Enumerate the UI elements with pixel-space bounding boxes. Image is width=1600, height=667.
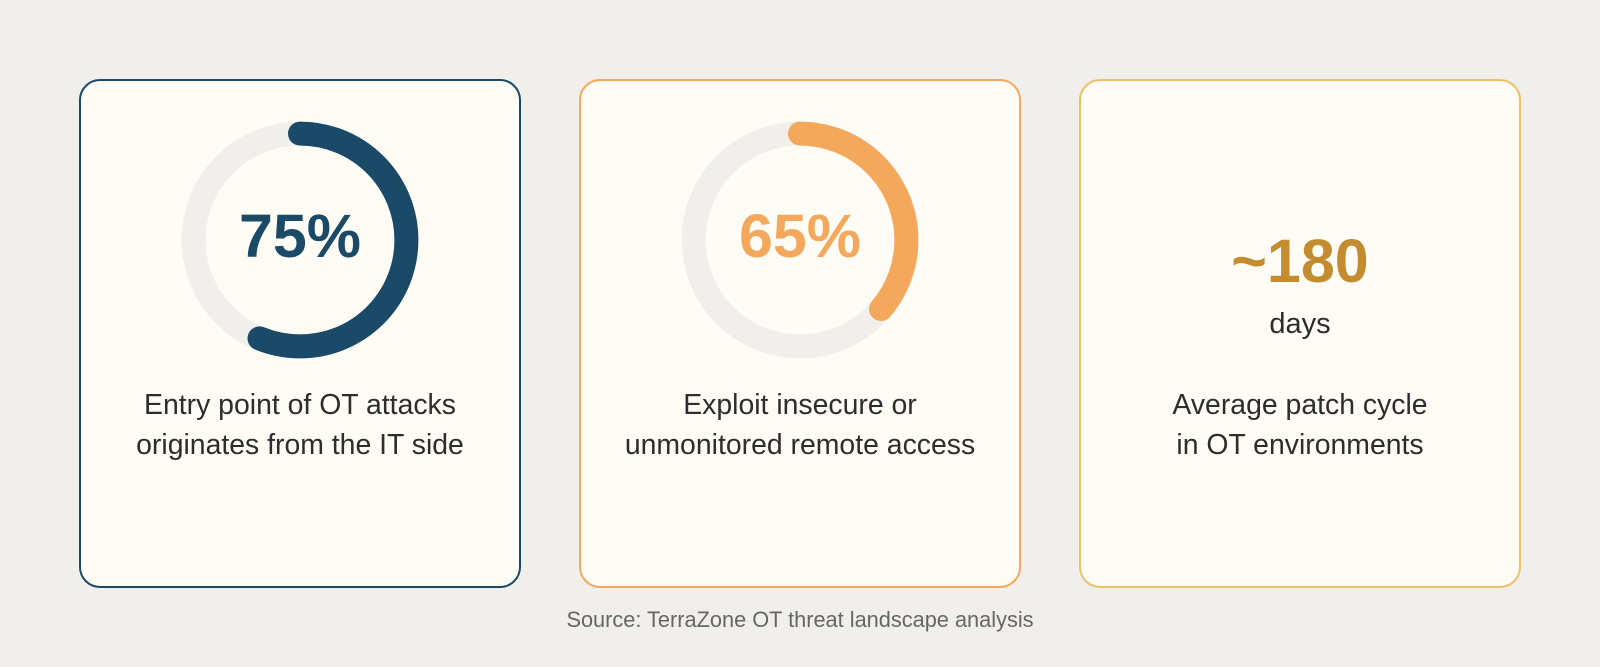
unit: days: days [1269,308,1331,340]
description: entry point: Entry point of OT attacks [144,389,456,421]
description: patch cycle [1172,389,1428,461]
panel: patch cycle [1079,79,1521,588]
donut chart: 75% [182,122,418,358]
source note: Source: TerraZone OT threat landscape analysis [566,607,1034,632]
value: ~180: ~180 [1231,227,1369,295]
description: entry point [136,389,464,461]
donut chart: 65% [682,122,918,358]
description: remote access [625,389,975,461]
description: entry point: originates from the IT side [136,429,464,461]
description: patch cycle: in OT environments [1176,429,1424,461]
description: remote access: Exploit insecure or [683,389,917,421]
description: patch cycle: Average patch cycle [1172,389,1428,421]
panel: remote access [579,79,1021,588]
description: remote access: unmonitored remote access [625,429,975,461]
value: 65%: 65% [739,202,861,270]
panel: entry point of OT attacks [79,79,521,588]
value: 75%: 75% [239,202,361,270]
